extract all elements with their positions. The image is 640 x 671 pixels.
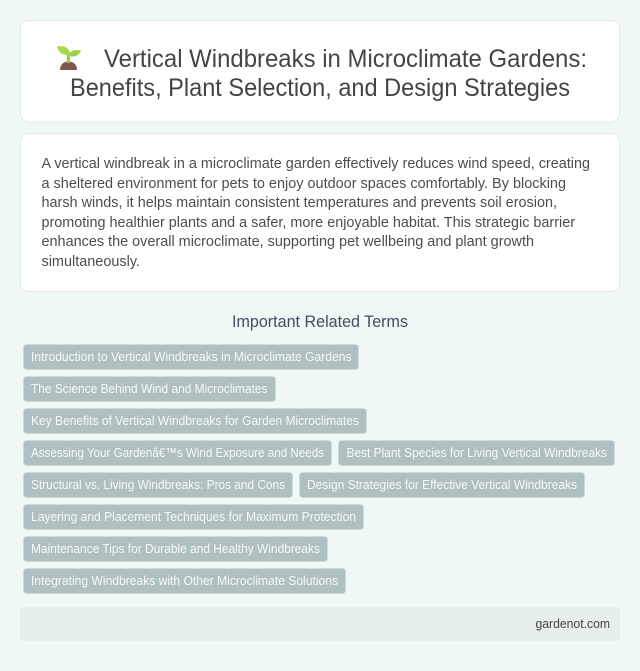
text block: description paragraph: harsh winds, it helps maintain consistent temperatures and prevents soil erosion, bbox=[42, 195, 557, 211]
tag: science bbox=[24, 376, 276, 402]
tag: introduction bbox=[24, 344, 358, 370]
tag: integrating bbox=[24, 568, 346, 594]
footer source text: gardenot.com bbox=[536, 616, 610, 631]
footer bar bbox=[20, 607, 620, 641]
text block: description paragraph: a sheltered environment for pets to enjoy outdoor spaces comfortably. By blocking bbox=[42, 176, 566, 192]
panel: title card bbox=[20, 20, 620, 122]
tag: design strategies: Design Strategies for Effective Vertical Windbreaks bbox=[307, 477, 577, 492]
tag: integrating: Integrating Windbreaks with Other Microclimate Solutions bbox=[31, 573, 338, 588]
tag: maintenance bbox=[24, 536, 328, 562]
icon: seedling bbox=[57, 46, 81, 70]
tag: key benefits: Key Benefits of Vertical Windbreaks for Garden Microclimates bbox=[31, 413, 359, 428]
title: Benefits, Plant Selection, and Design Strategies bbox=[70, 74, 570, 102]
text block: description paragraph: A vertical windbreak in a microclimate garden effectively reduces wind speed, creating bbox=[42, 156, 590, 172]
tag: plant species: Best Plant Species for Living Vertical Windbreaks bbox=[346, 445, 607, 460]
tag: structural vs living: Structural vs. Living Windbreaks: Pros and Cons bbox=[31, 477, 285, 492]
tag: layering bbox=[24, 504, 364, 530]
tag: layering: Layering and Placement Techniques for Maximum Protection bbox=[31, 509, 356, 524]
tag: science: The Science Behind Wind and Microclimates bbox=[31, 381, 268, 396]
tag: structural vs living bbox=[24, 472, 292, 498]
tag: plant species bbox=[338, 440, 614, 466]
heading: important related terms: Important Related Terms bbox=[232, 313, 408, 331]
title bbox=[70, 45, 587, 102]
tag: design strategies bbox=[300, 472, 584, 498]
panel: description bbox=[20, 134, 620, 292]
tag: assessing exposure: Assessing Your Gardenâ€™s Wind Exposure and Needs bbox=[31, 445, 324, 460]
tag: key benefits bbox=[24, 408, 366, 434]
text block: description paragraph: enhances the overall microclimate, supporting pet wellbeing and plant growth bbox=[42, 234, 534, 250]
text block: description paragraph bbox=[42, 156, 590, 270]
title: Vertical Windbreaks in Microclimate Gardens: bbox=[104, 45, 587, 73]
text block: description paragraph: promoting healthier plants and a safer, more enjoyable habitat. This strategic barrier bbox=[42, 215, 575, 231]
tag list bbox=[24, 344, 614, 594]
tag: assessing exposure bbox=[24, 440, 332, 466]
text block: description paragraph: simultaneously. bbox=[42, 254, 140, 270]
tag: maintenance: Maintenance Tips for Durable and Healthy Windbreaks bbox=[31, 541, 320, 556]
tag: introduction: Introduction to Vertical Windbreaks in Microclimate Gardens bbox=[31, 349, 352, 364]
